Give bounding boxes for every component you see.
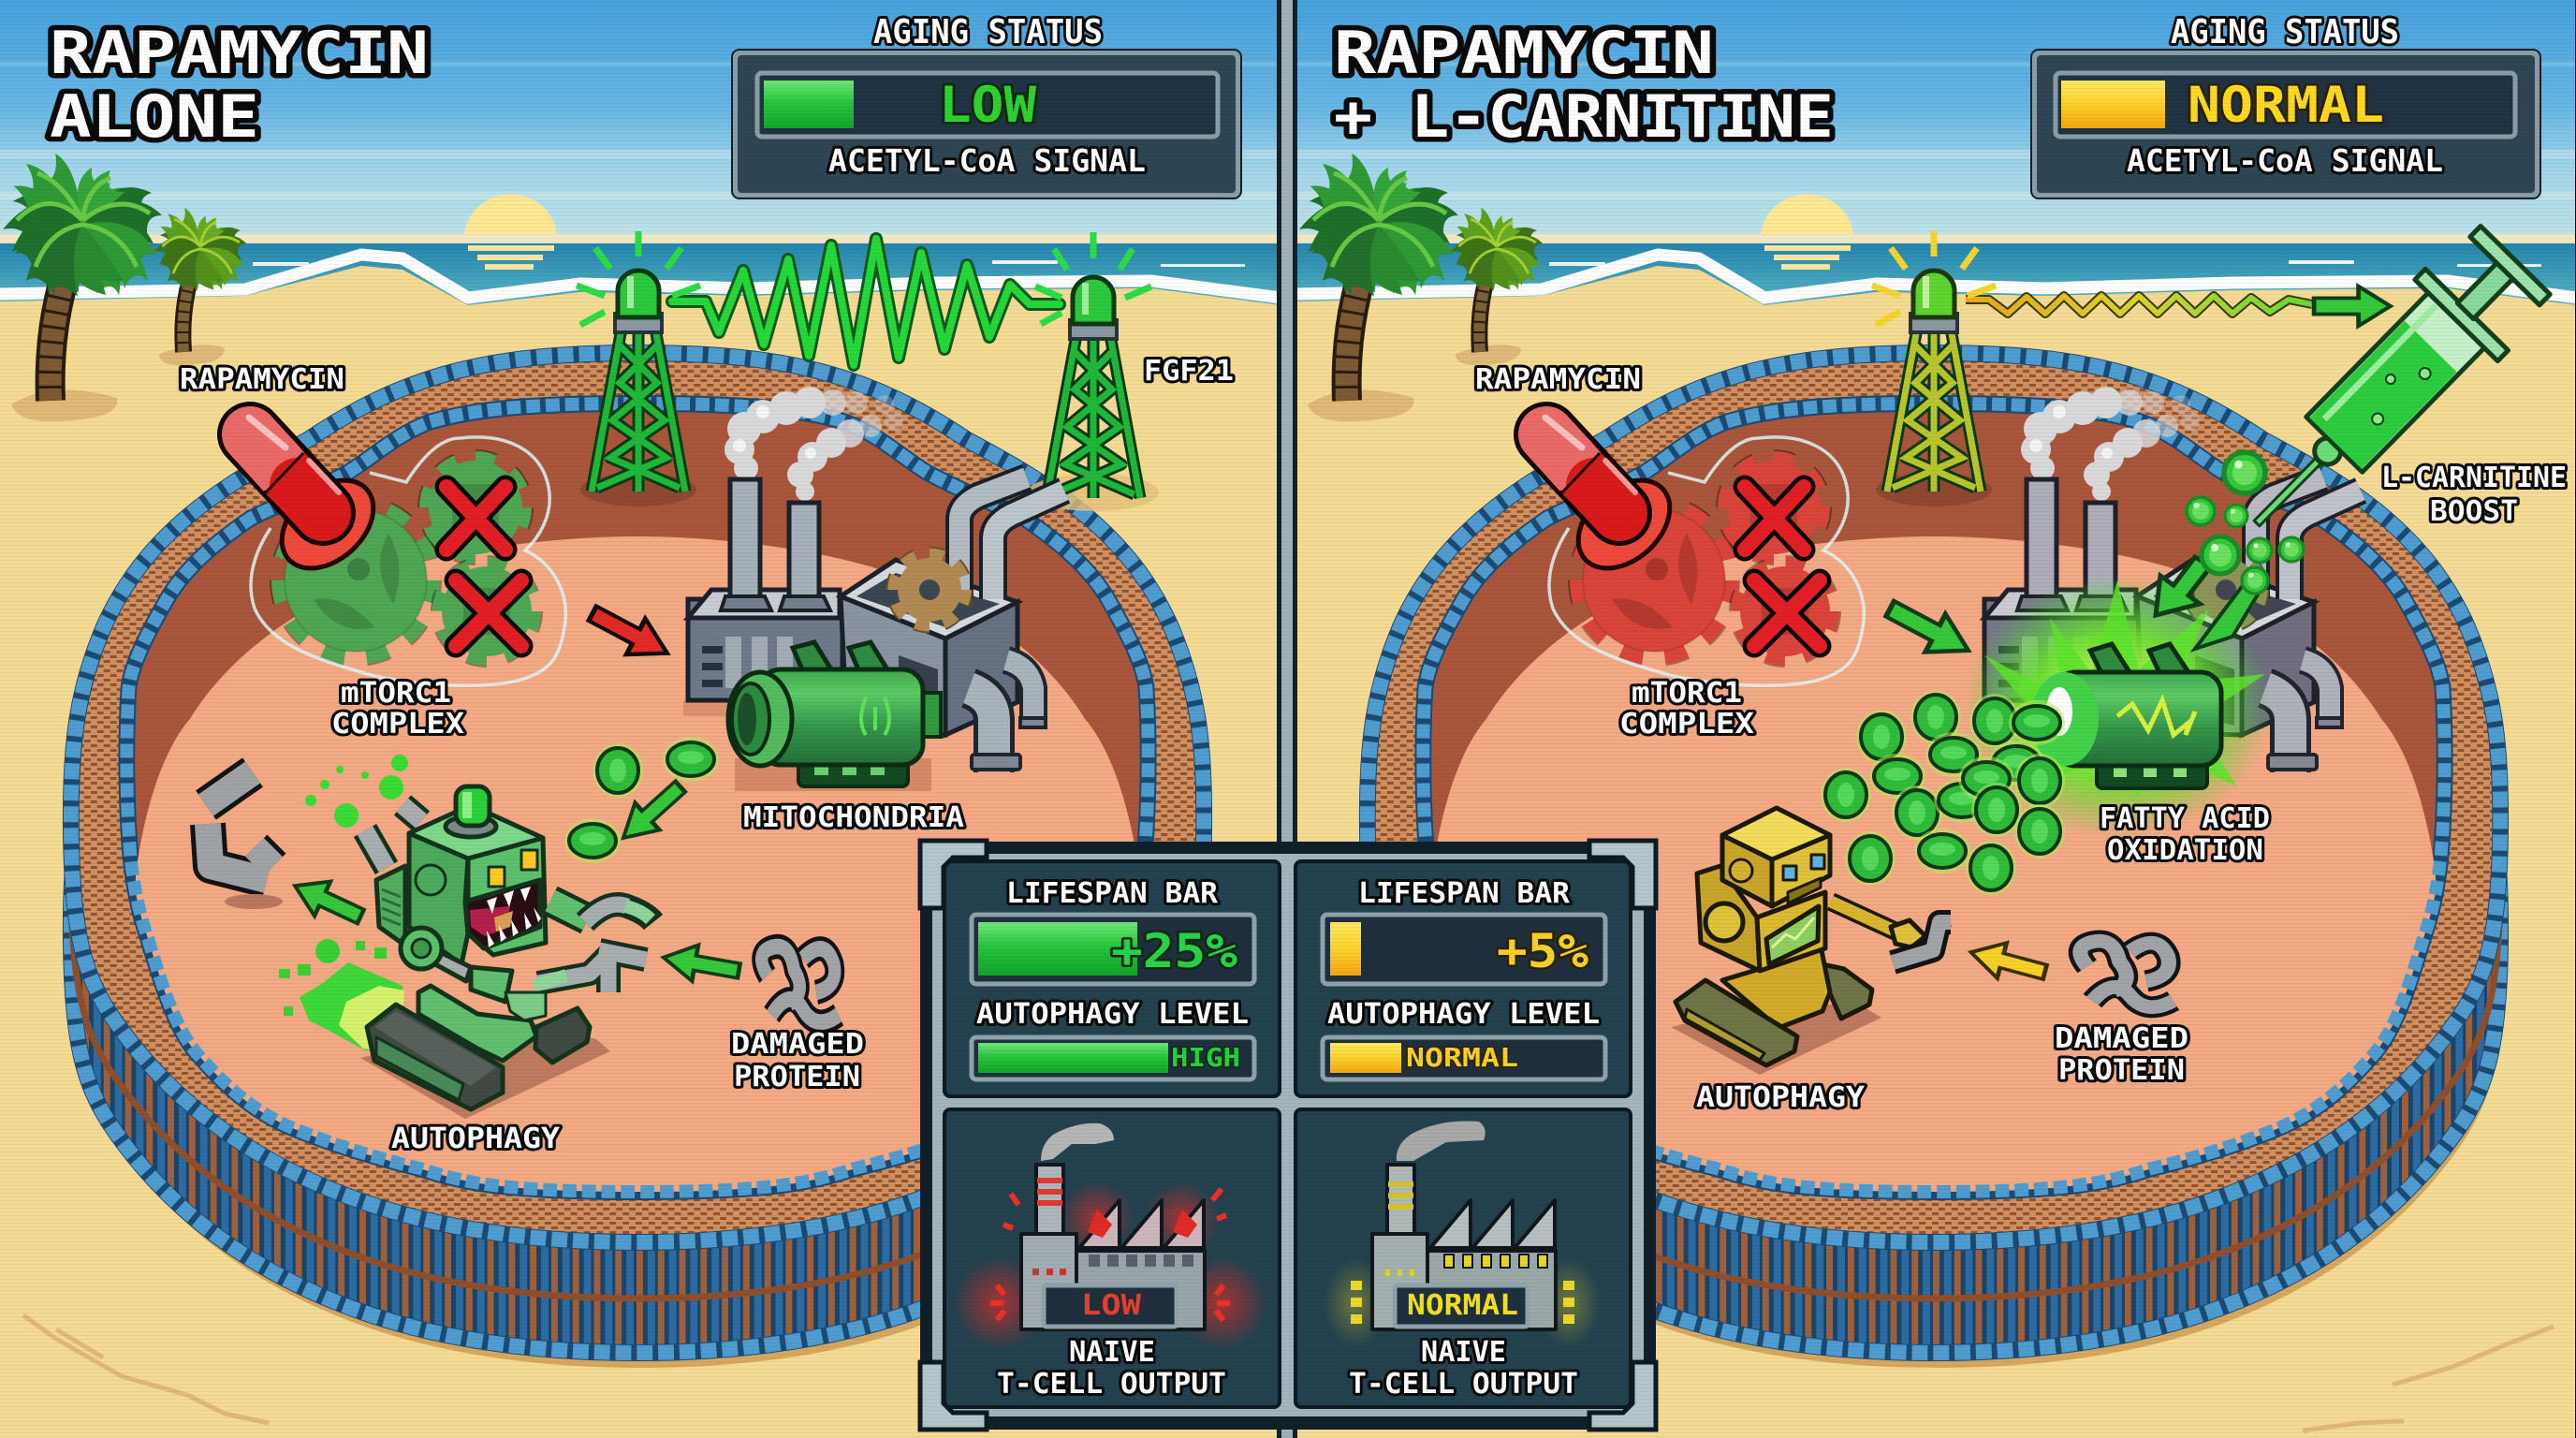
capsule: rapamycin right bbox=[1545, 418, 1687, 586]
label: aging status right: AGING STATUS bbox=[2171, 13, 2399, 51]
text: naive T-cell right bbox=[1349, 1336, 1578, 1401]
green burst bbox=[1963, 576, 2272, 838]
status panel: left: ACETYL-CoA SIGNAL bbox=[828, 142, 1146, 179]
text: autophagy level right: AUTOPHAGY LEVEL bbox=[1327, 998, 1600, 1031]
label: mitochondria: MITOCHONDRIA bbox=[743, 801, 964, 834]
text: naive T-cell left bbox=[997, 1336, 1226, 1401]
lifespan bar: left bbox=[972, 915, 1254, 984]
factory: mitochondria left bbox=[683, 477, 1064, 772]
damaged protein: left bbox=[762, 946, 839, 1022]
value: +5%: +5% bbox=[1497, 924, 1588, 978]
panel: left cell membrane bbox=[71, 353, 1208, 1368]
fatty acid coins: left bbox=[564, 737, 719, 863]
arrow: green to robot bbox=[611, 773, 693, 851]
arrow: green output bbox=[287, 869, 369, 933]
label: L-carnitine boost: L-CARNITINE bbox=[2381, 462, 2567, 494]
signal wave: FGF21 left bbox=[672, 239, 1060, 365]
tower: left bbox=[577, 231, 700, 506]
arrow: to syringe bbox=[2314, 286, 2391, 326]
panel: center stats frame bbox=[920, 841, 1656, 1430]
damaged protein: in gripper bbox=[1893, 922, 1951, 962]
text: autophagy level left: AUTOPHAGY LEVEL bbox=[976, 998, 1249, 1031]
tower: right yellow bbox=[1872, 231, 1996, 506]
status panel: right bbox=[2031, 50, 2540, 198]
label: autophagy left: AUTOPHAGY bbox=[391, 1123, 560, 1155]
text: lifespan left: LIFESPAN BAR bbox=[1006, 877, 1219, 910]
value: high: HIGH bbox=[1171, 1042, 1240, 1073]
label: damaged protein left bbox=[731, 1028, 864, 1093]
factory icon: low T-cell output bbox=[954, 1123, 1266, 1350]
text: naive T-cell left: T-CELL OUTPUT bbox=[997, 1368, 1226, 1401]
cell: top-left bbox=[944, 861, 1280, 1096]
text: lifespan right: LIFESPAN BAR bbox=[1358, 877, 1571, 910]
mTORC1 gears: left bbox=[251, 437, 565, 685]
label: damaged protein right: DAMAGED bbox=[2055, 1022, 2188, 1055]
label: damaged protein left: DAMAGED bbox=[731, 1028, 864, 1061]
label: fatty acid oxidation bbox=[2100, 802, 2270, 867]
mTORC1 gears: right red bbox=[1549, 437, 1864, 685]
divider bbox=[1277, 0, 1297, 1438]
robot: autophagy right yellow bbox=[1671, 808, 1925, 1075]
cell: bottom-left bbox=[944, 1109, 1280, 1407]
title: left: ALONE bbox=[50, 82, 259, 151]
label: aging status left: AGING STATUS bbox=[873, 13, 1103, 51]
label: autophagy right: AUTOPHAGY bbox=[1696, 1081, 1865, 1114]
factory icon: normal T-cell output bbox=[1324, 1122, 1601, 1348]
label: rapamycin right: RAPAMYCIN bbox=[1475, 363, 1641, 396]
fatty acid coins: right bbox=[1821, 690, 2065, 895]
title: right: + L-CARNITINE bbox=[1334, 82, 1834, 151]
cell: top-right bbox=[1295, 861, 1631, 1096]
label: mTORC1 complex right: mTORC1 bbox=[1632, 677, 1742, 710]
arrow: green to factory bbox=[1880, 590, 1979, 669]
title: left: RAPAMYCIN bbox=[50, 19, 429, 87]
autophagy bar: left bbox=[972, 1037, 1254, 1079]
panel: right cell membrane bbox=[1368, 353, 2504, 1368]
status panel: left bbox=[732, 50, 1241, 198]
cell: bottom-right bbox=[1295, 1109, 1631, 1407]
label: damaged protein left: PROTEIN bbox=[734, 1061, 860, 1093]
smoke left bbox=[724, 387, 903, 501]
text: naive T-cell left: NAIVE bbox=[1069, 1336, 1155, 1369]
bubbles: L-carnitine bbox=[2187, 452, 2304, 594]
arrow: yellow bbox=[1967, 934, 2050, 990]
text: naive T-cell right: NAIVE bbox=[1421, 1336, 1506, 1369]
label: damaged protein right bbox=[2055, 1022, 2188, 1087]
text: naive T-cell right: T-CELL OUTPUT bbox=[1349, 1368, 1578, 1401]
sparkles: left bbox=[305, 755, 408, 828]
motor: right glowing bbox=[2031, 644, 2221, 788]
factory: fatty acid oxidation bbox=[1980, 477, 2361, 772]
label: mTORC1 complex left: COMPLEX bbox=[331, 708, 464, 741]
damaged protein: right bbox=[2080, 941, 2174, 1007]
arrow: red inhibition bbox=[583, 595, 677, 671]
label: L-carnitine boost bbox=[2381, 462, 2567, 528]
label: mTORC1 complex right bbox=[1619, 677, 1754, 741]
label: fatty acid oxidation: FATTY ACID bbox=[2100, 802, 2270, 835]
arrow: L-carnitine into factory bbox=[2156, 557, 2211, 615]
robot: autophagy left bbox=[279, 786, 653, 1119]
label: damaged protein right: PROTEIN bbox=[2058, 1054, 2185, 1087]
status panel: left: LOW bbox=[939, 77, 1036, 134]
label: mTORC1 complex left: mTORC1 bbox=[341, 677, 451, 710]
title: right: RAPAMYCIN bbox=[1334, 19, 1714, 87]
value: +25%: +25% bbox=[1111, 924, 1237, 978]
arrow: green input bbox=[660, 940, 742, 989]
status panel: right: ACETYL-CoA SIGNAL bbox=[2127, 142, 2443, 179]
capsule: rapamycin left bbox=[249, 418, 390, 586]
lifespan bar: right bbox=[1323, 915, 1605, 984]
label: fatty acid oxidation: OXIDATION bbox=[2107, 834, 2263, 867]
smoke right bbox=[2021, 387, 2200, 501]
panel: right beach background bbox=[1287, 0, 2576, 1438]
panel: left beach background bbox=[0, 0, 1281, 1438]
syringe: L-carnitine bbox=[2216, 220, 2556, 564]
title: left bbox=[50, 19, 429, 151]
value: normal output: NORMAL bbox=[1407, 1289, 1518, 1322]
label: mTORC1 complex right: COMPLEX bbox=[1619, 708, 1754, 741]
sand marks right bbox=[2303, 1327, 2554, 1431]
label: rapamycin left: RAPAMYCIN bbox=[180, 363, 344, 396]
recycled fragments bbox=[206, 772, 283, 909]
autophagy bar: right bbox=[1323, 1037, 1605, 1079]
tower: FGF21 bbox=[1028, 232, 1159, 511]
swoosh: carnitine stream bbox=[2195, 580, 2258, 649]
label: L-carnitine boost: BOOST bbox=[2430, 495, 2518, 528]
value: low output: LOW bbox=[1081, 1289, 1142, 1322]
label: FGF21: FGF21 bbox=[1144, 355, 1234, 388]
title: right bbox=[1334, 19, 1834, 151]
label: mTORC1 complex left bbox=[331, 677, 464, 741]
status panel: right: NORMAL bbox=[2188, 77, 2384, 134]
motor: left mitochondria bbox=[728, 642, 941, 791]
corner brackets bbox=[920, 841, 1656, 1430]
value: normal autophagy: NORMAL bbox=[1406, 1042, 1518, 1073]
wave: yellow signal right bbox=[1966, 296, 2312, 314]
